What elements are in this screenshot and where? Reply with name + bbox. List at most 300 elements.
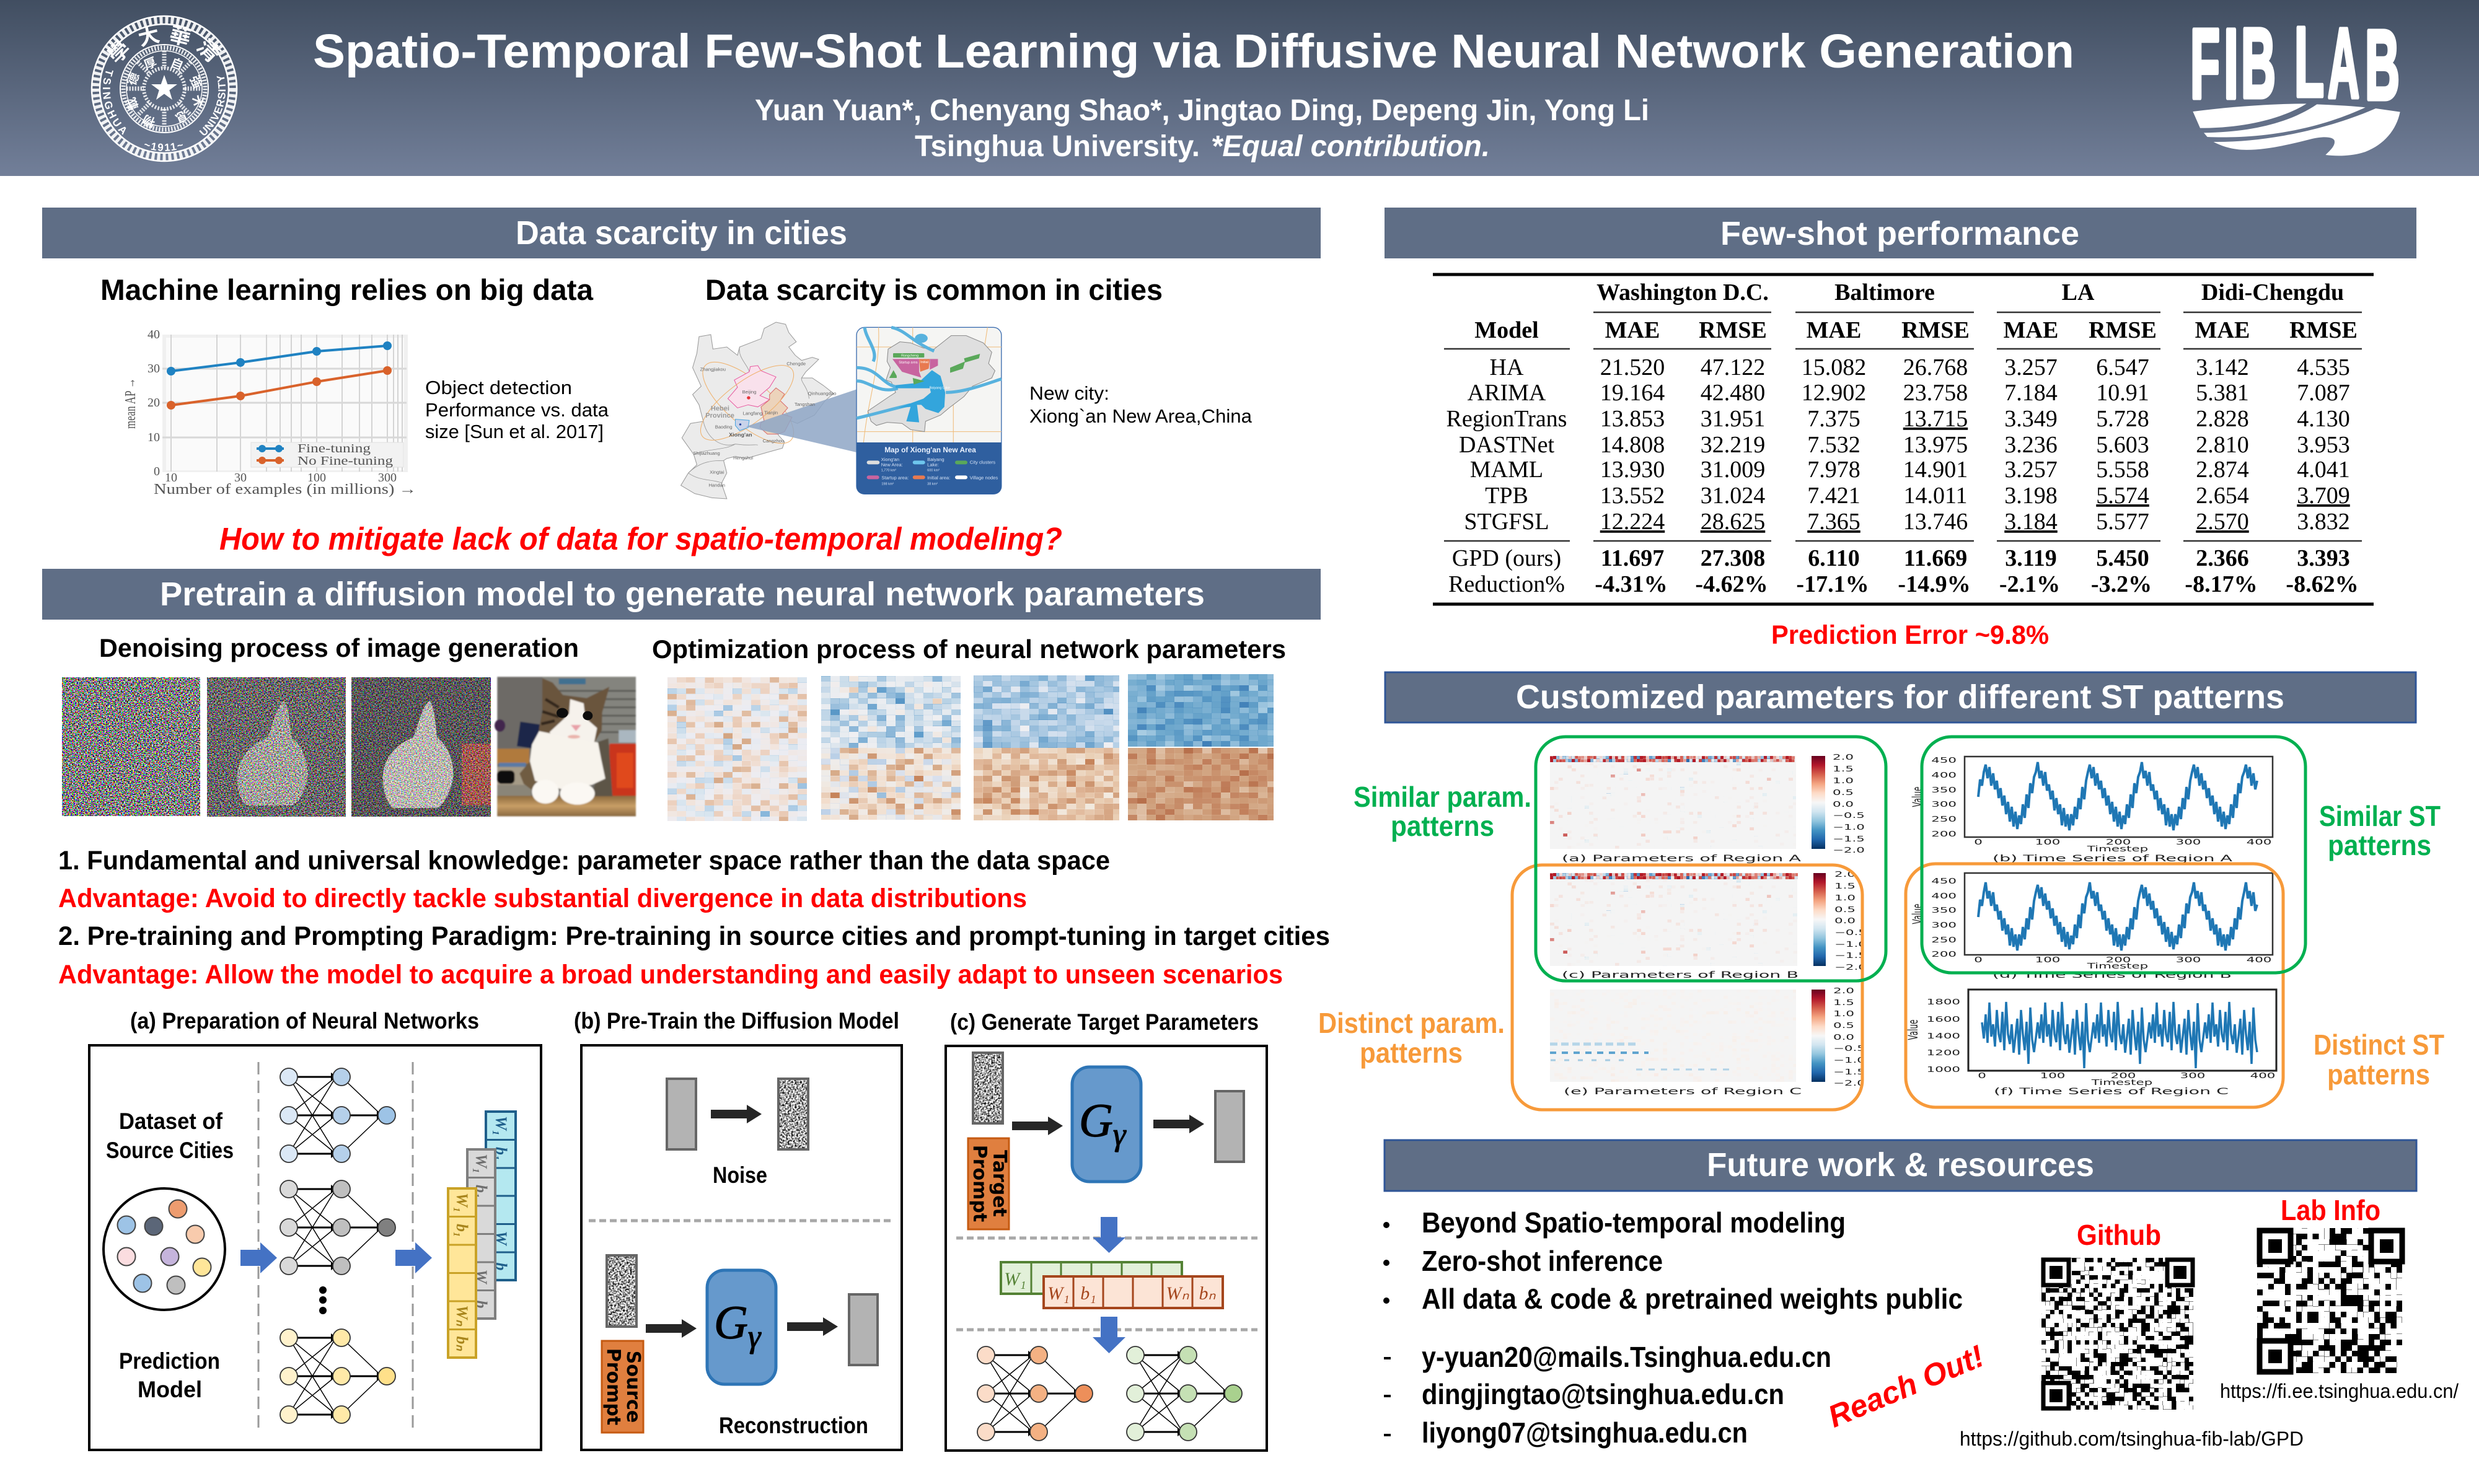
icon: FIB LAB logo: A [2328,7,2359,118]
line chart: time series of region A: Value [1911,787,1926,807]
icon: Tsinghua University seal: 大 [136,23,162,51]
label: distinct param patterns: Distinct param. [1318,1007,1505,1039]
icon: FIB LAB logo [2190,6,2400,156]
table row: TPB: 5.574 [2096,483,2149,509]
table row: RegionTrans: 7.375 [1807,406,1860,432]
box: source prompt: Source [622,1351,644,1423]
label: dataset of source cities [106,1109,234,1163]
heatmap: parameters of region C [1550,987,1884,1097]
parameter stack: cyan [486,1112,516,1280]
map: Xiong'an New Area inset: 38 km² [927,483,938,486]
map: Xiong'an New Area inset [856,327,1002,494]
heatmap: parameters of region C: 1.0 [1833,1010,1854,1018]
map: Beijing-Tianjin-Hebei region: Xiong'an [729,431,752,437]
line chart: time series of region C: 1800 [1927,998,1960,1006]
table row: TPB: 2.654 [2196,483,2249,509]
contact emails [1384,1341,1831,1449]
table row: HA: 26.768 [1903,354,1968,380]
block: output parameters [1215,1091,1244,1162]
table row: HA: HA [1490,354,1524,380]
table row: DASTNet: 3.236 [2004,432,2058,458]
line chart: time series of region A [1911,757,2273,864]
QR code: lab info [2257,1228,2405,1374]
block: generator G gamma [1072,1067,1141,1182]
heatmap: parameters of region C: (e) Parameters of Region C [1564,1087,1802,1097]
table row: STGFSL: 5.577 [2096,509,2149,535]
contact emails: y-yuan20@mails.Tsinghua.edu.cn [1422,1341,1831,1373]
line chart: time series of region B: 250 [1931,936,1957,944]
label: reconstruction: Reconstruction [719,1413,868,1438]
heatmap: parameters of region B: 1.0 [1834,894,1856,902]
arrow: networks to parameters [395,1242,432,1273]
line chart: time series of region A: 0 [1974,838,1983,846]
heatmap: parameters of region C: −0.5 [1833,1045,1865,1053]
diagram (c) heading: (c) Generate Target Parameters [950,1009,1259,1035]
link: github url: https://github.com/tsinghua-fib-lab/GPD [1960,1428,2304,1450]
table row: STGFSL: 2.570 [2196,509,2249,535]
map: Beijing-Tianjin-Hebei region: Tangshan [795,402,815,407]
table row: TPB: 7.421 [1807,483,1860,509]
map: Beijing-Tianjin-Hebei region: Beijing [742,389,756,395]
callout: research question: How to mitigate lack of data for spatio-temporal modeling? [219,521,1062,556]
table row: RegionTrans: RegionTrans [1446,406,1567,432]
line chart: time series of region B: 300 [1931,921,1957,929]
heatmap: parameters of region A: 0.0 [1833,801,1854,809]
heading bar: pretrain [42,569,1321,620]
table row: TPB: 3.709 [2297,483,2350,509]
map: Xiong'an New Area inset: City clusters [970,460,995,465]
line chart: time series of region A: 200 [2106,838,2131,846]
block: clean parameters [667,1079,696,1149]
parameter stack: yellow: b₁ [453,1224,471,1237]
heatmap: parameters of region A: −0.5 [1833,812,1865,820]
table row: reduction: -4.62% [1695,571,1768,597]
table row: reduction: -4.31% [1595,571,1668,597]
line chart: mean AP vs examples: 0 [154,465,160,478]
parameter row: green [1001,1262,1182,1294]
callout: prediction error: Prediction Error ~9.8% [1771,620,2049,650]
line chart: time series of region A: 300 [2176,838,2201,846]
line chart: time series of region B: 400 [1931,892,1957,900]
block: reconstructed parameters [849,1294,878,1365]
line chart: time series of region A: 300 [1931,801,1957,809]
parameter row: green: W₁ [1004,1269,1026,1289]
ellipsis dots [319,1286,327,1314]
table row: ARIMA: 19.164 [1600,380,1665,406]
label: similar param patterns [1354,781,1531,842]
heatmap: parameters of region B: 0.5 [1834,906,1856,914]
table row: reduction: -8.62% [2286,571,2359,597]
line chart: time series of region C: 1400 [1927,1032,1960,1040]
table row: MAML: 7.978 [1807,457,1860,483]
label: distinct param patterns [1318,1007,1505,1069]
icon: Tsinghua University seal [90,15,238,162]
table header: metrics: Model [1474,317,1539,343]
table row: MAML: 31.009 [1701,457,1765,483]
arrow: down to networks [1093,1317,1125,1353]
map: Xiong'an New Area inset: 198 km² [881,483,894,486]
table row: MAML: 3.257 [2004,457,2058,483]
map caption: new city: New city: [1029,382,1109,404]
table header: metrics: MAE [1605,317,1660,343]
parameter row: orange: b₁ [1080,1283,1096,1304]
line chart: time series of region C: Value [1906,1020,1921,1040]
icon: Tsinghua University seal: 清 [192,35,224,67]
icon: Tsinghua University seal: 德 [125,71,143,87]
icon: Tsinghua University seal: 強 [187,74,205,90]
line chart: time series of region B: 350 [1931,907,1957,915]
box: target prompt [968,1138,1010,1229]
parameter stack: gray: b₁ [472,1185,490,1198]
table header: metrics: RMSE [1699,317,1767,343]
table row: RegionTrans: 5.728 [2096,406,2149,432]
icon: FIB LAB logo: L [2294,6,2324,117]
heatmap: parameters of region B: 0.0 [1834,917,1856,925]
icon: Tsinghua University seal: 厚 [142,55,159,72]
table row: reduction: -2.1% [1999,571,2060,597]
heatmap: parameters of region C: 1.5 [1833,999,1854,1007]
line chart: time series of region A: 400 [1931,771,1957,779]
table row: HA: 21.520 [1600,354,1665,380]
map: Beijing-Tianjin-Hebei region: Xingtai [710,469,724,475]
map: Xiong'an New Area inset: 600 km² [927,469,940,473]
affiliation: Tsinghua University. [915,130,1200,163]
network: blue [280,1068,395,1162]
map: Beijing-Tianjin-Hebei region: Cangzhou [763,438,784,444]
icon: Tsinghua University seal: ~1911~ [144,143,183,151]
line chart: time series of region A: 200 [1931,830,1957,838]
authors: Yuan Yuan*, Chenyang Shao*, Jingtao Ding, Depeng Jin, Yong Li [755,94,1649,127]
heading bar: future work: Future work & resources [1707,1146,2094,1183]
table row: TPB: 14.011 [1903,483,1968,509]
map: Beijing-Tianjin-Hebei region: Zhangjiakou [700,366,726,372]
panel: customized parameters [1318,672,2444,1110]
bullet list: future work: Zero-shot inference [1422,1245,1663,1277]
line chart: mean AP vs examples: 300 [378,471,397,485]
map caption: new city [1029,382,1253,427]
heatmap: parameters of region B: −2.0 [1834,964,1867,972]
heading bar: data scarcity: Data scarcity in cities [516,214,847,252]
icon: Tsinghua University seal: 不 [188,92,206,109]
photo: cat [495,677,636,816]
heading bar: few-shot: Few-shot performance [1720,215,2079,252]
table row: DASTNet: 5.603 [2096,432,2149,458]
label: similar ST patterns [2319,800,2441,861]
table row: ARIMA: 42.480 [1701,380,1765,406]
heatmap: parameters of region A: 2.0 [1833,753,1854,762]
table row: TPB: 3.198 [2004,483,2058,509]
text block: key points: Advantage: Allow the model to acquire a broad understanding and easily adapt to unseen scenarios [58,960,1283,990]
parameter stack: yellow [448,1188,476,1358]
block: generator G gamma: γ [748,1319,762,1354]
arrow: input to generator [1012,1117,1063,1135]
table row: GPD ours: 3.393 [2297,545,2350,571]
table row: STGFSL: 3.832 [2297,509,2350,535]
table row: ARIMA: 12.902 [1802,380,1866,406]
block: generator G gamma: G [1079,1095,1113,1147]
table row: ARIMA: 23.758 [1903,380,1968,406]
line chart: time series of region B: Timestep [2087,962,2148,970]
diagram (b) heading: (b) Pre-Train the Diffusion Model [574,1008,899,1034]
heading bar: few-shot [1385,208,2416,258]
table row: STGFSL: STGFSL [1464,509,1549,535]
text block: key points [58,846,1330,990]
line chart: time series of region C: 0 [1978,1072,1986,1080]
header banner: B [2365,9,2400,120]
subheading: data scarcity common: Data scarcity is common in cities [705,273,1163,306]
table row: STGFSL: 13.746 [1903,509,1968,535]
heatmap: parameters of region C: 0.5 [1833,1022,1854,1030]
heading bar: customized parameters [1385,672,2416,722]
icon: Tsinghua University seal: UNIVERSITY [199,76,226,135]
label: lab info: Lab Info [2281,1194,2380,1226]
table row: MAML: MAML [1470,457,1543,483]
line chart: time series of region B: 200 [1931,951,1957,959]
table row: HA: 15.082 [1802,354,1866,380]
table row: HA: 4.535 [2297,354,2350,380]
line chart: time series of region C: Timestep [2091,1079,2152,1087]
icon: FIB LAB logo: F [2190,8,2220,119]
table row: STGFSL: 7.365 [1807,509,1860,535]
bullet list: future work: All data & code & pretrained weights public [1422,1283,1963,1315]
chart caption: object detection: Performance vs. data [425,399,609,421]
heatmap: parameters of region B: 2.0 [1834,871,1856,879]
line chart: time series of region A: 100 [2035,838,2060,846]
equal contribution note: *Equal contribution. [1211,130,1490,163]
table row: DASTNet: 3.953 [2297,432,2350,458]
table row: STGFSL: 12.224 [1600,509,1665,535]
line chart: time series of region B: Value [1911,904,1926,924]
network: orange [977,1346,1093,1441]
chart caption: object detection [425,377,609,442]
highlight boxes: similar patterns [1536,737,2305,981]
table row: GPD ours: 27.308 [1701,545,1765,571]
table row: ARIMA: 10.91 [2096,380,2149,406]
arrow: generator to output [787,1317,838,1336]
table header: metrics: MAE [2195,317,2250,343]
map: Beijing-Tianjin-Hebei region: Handan [708,483,725,488]
map: Beijing-Tianjin-Hebei region: Qinhuangdao [808,391,836,397]
map: Xiong'an New Area inset: Map of Xiong'an New Area [884,446,976,454]
label: dataset of source cities: Source Cities [106,1138,234,1163]
chart caption: object detection: Object detection [425,377,572,398]
panel: data scarcity in cities [42,208,1321,556]
panel: pretrain a diffusion model [42,569,1330,1451]
text block: key points: Advantage: Avoid to directly tackle substantial divergence in data distributions [58,884,1027,913]
table header: cities: LA [2062,279,2095,305]
parameter row: orange: Wₙ [1166,1283,1190,1304]
line chart: time series of region B: 0 [1974,956,1983,964]
diagram (c): generate target parameters [946,1046,1267,1451]
line chart: time series of region B: (d) Time Series of Region B [1992,970,2232,980]
image strip: parameter heatmaps [667,674,1274,821]
heatmap: parameters of region A: (a) Parameters of Region A [1562,854,1802,864]
line chart: mean AP vs examples: 100 [307,471,326,485]
map: Beijing-Tianjin-Hebei region: Chengde [786,361,806,366]
line chart: time series of region A: (b) Time Series of Region A [1992,854,2233,864]
label: similar param patterns: patterns [1391,810,1494,842]
heading bar: future work [1385,1140,2416,1191]
block: noisy input [607,1255,636,1327]
map: Beijing-Tianjin-Hebei region: Province [705,412,734,419]
line chart: mean AP vs examples: 10 [148,431,160,444]
heatmap: parameters of region B: −0.5 [1834,929,1867,937]
line chart: mean AP vs examples: 30 [234,471,247,485]
heatmap: parameters of region B: −1.5 [1834,952,1867,960]
map: Beijing-Tianjin-Hebei region: Baoding [715,424,733,430]
line chart: mean AP vs examples: 40 [148,328,160,341]
map: Xiong'an New Area inset: Baiyang Lake [930,386,950,390]
map: Xiong'an New Area inset: 1,770 km² [881,469,896,473]
table row: MAML: 14.901 [1903,457,1968,483]
table row: RegionTrans: 31.951 [1701,406,1765,432]
icon: Tsinghua University seal: 息 [173,107,190,126]
map: Xiong'an New Area inset: Baiyang [927,457,944,462]
label: similar ST patterns: patterns [2328,829,2431,861]
parameter stack: yellow: W₁ [453,1193,471,1213]
label: distinct ST patterns: patterns [2327,1058,2430,1091]
table row: reduction: Reduction% [1448,571,1565,597]
parameter row: orange: bₙ [1199,1283,1217,1304]
table row: GPD ours: 11.669 [1904,545,1967,571]
label: similar ST patterns: Similar ST [2319,800,2441,832]
table row: GPD ours: 2.366 [2196,545,2249,571]
heading bar: data scarcity [42,208,1321,258]
table row: RegionTrans: 3.349 [2004,406,2058,432]
block: noise input [973,1053,1003,1123]
heatmap: parameters of region C: −1.5 [1833,1068,1865,1076]
block: generator G gamma: G [714,1297,748,1349]
table row: TPB: 31.024 [1701,483,1765,509]
table row: RegionTrans: 13.715 [1903,406,1968,432]
icon: Tsinghua University seal: 載 [124,95,141,112]
parameter stack: cyan: W [492,1231,510,1246]
label: distinct param patterns: patterns [1360,1037,1463,1069]
table row: MAML: 5.558 [2096,457,2149,483]
table row: STGFSL: 28.625 [1701,509,1765,535]
table row: RegionTrans: 2.828 [2196,406,2249,432]
icon: Tsinghua University seal: 學 [103,37,135,68]
map: Beijing-Tianjin-Hebei region: Tianjin [764,410,778,415]
panel: future work and resources [1383,1140,2459,1450]
table row: GPD ours: 5.450 [2096,545,2149,571]
line chart: time series of region C: (f) Time Series of Region C [1994,1087,2229,1097]
table row: HA: 3.257 [2004,354,2058,380]
heatmap: parameters of region A: 0.5 [1833,789,1854,797]
subheading: machine learning: Machine learning relies on big data [100,273,594,306]
table row: DASTNet: 13.975 [1903,432,1968,458]
table row: RegionTrans: 13.853 [1600,406,1665,432]
heatmap: parameters of region B [1550,871,1884,980]
panel: few-shot performance [1385,208,2416,650]
label: github: Github [2077,1219,2161,1251]
table row: MAML: 4.041 [2297,457,2350,483]
parameter stack: cyan: b₁ [492,1147,510,1161]
label: prediction model: Model [138,1377,202,1402]
text block: key points: 2. Pre-training and Prompting Paradigm: Pre-training in source cities and prompt-tuning in target cities [58,921,1330,951]
line chart: time series of region C: 1000 [1927,1066,1960,1074]
heatmap: parameters of region A [1550,753,1865,864]
table row: reduction: -17.1% [1796,571,1869,597]
map: Xiong'an New Area inset: Rongcheng [901,354,918,358]
label: noise: Noise [713,1162,767,1188]
line chart: time series of region A: 350 [1931,786,1957,794]
table row: GPD ours: 3.119 [2005,545,2057,571]
bullet list: future work: Beyond Spatio-temporal modeling [1422,1206,1846,1239]
line chart: time series of region A: 250 [1931,815,1957,823]
block: generator G gamma: γ [1113,1117,1127,1153]
heatmap: parameters of region A: −2.0 [1833,846,1865,854]
heatmap: parameters of region A: 1.5 [1833,765,1854,773]
heatmap: parameters of region A: 1.0 [1833,777,1854,785]
table row: ARIMA: 7.087 [2297,380,2350,406]
map: Xiong'an New Area inset: New Area: [881,462,903,468]
title: Spatio-Temporal Few-Shot Learning via Diffusive Neural Network Generation [313,25,2074,78]
box: target prompt: Prompt [969,1145,990,1222]
line chart: time series of region C: 200 [2111,1072,2136,1080]
network: yellow [280,1329,395,1423]
heading bar: pretrain: Pretrain a diffusion model to generate neural network parameters [160,576,1205,613]
line chart: time series of region C: 1200 [1927,1049,1960,1057]
table row: DASTNet: 7.532 [1807,432,1860,458]
map: Xiong'an New Area inset: Startup area [899,361,918,365]
label: prediction model [119,1348,220,1402]
arrow: generator to output [1153,1115,1204,1133]
parameter stack: yellow: Wₙ [453,1305,471,1327]
box: source prompt [602,1341,644,1433]
callout: reach out: Reach Out! [1823,1338,1989,1434]
chart caption: object detection: size [Sun et al. 2017] [425,421,604,442]
line chart: time series of region C [1906,990,2276,1097]
link: lab url: https://fi.ee.tsinghua.edu.cn/ [2220,1380,2459,1402]
diagram (a) heading: (a) Preparation of Neural Networks [130,1008,479,1034]
table row: ARIMA: 5.381 [2196,380,2249,406]
header banner [0,0,2479,176]
line chart: time series of region C: 100 [2040,1072,2065,1080]
parameter stack: cyan: W₁ [492,1116,510,1136]
label: similar param patterns: Similar param. [1354,781,1531,813]
table row: reduction: -8.17% [2185,571,2258,597]
parameter stack: yellow: bₙ [453,1336,471,1351]
line chart: mean AP vs examples: 10 [165,471,177,485]
map: Beijing-Tianjin-Hebei region: Shijiazhuang [693,450,720,456]
table header: cities: Baltimore [1834,279,1935,305]
parameter stack: gray: W₁ [472,1154,490,1174]
table row: DASTNet: 2.810 [2196,432,2249,458]
map: Xiong'an New Area inset: Initial area: [927,475,950,480]
table row: DASTNet: 14.808 [1600,432,1665,458]
line chart: time series of region B: 300 [2176,956,2201,964]
parameter stack: gray [467,1149,495,1319]
heatmap: parameters of region B: 1.5 [1834,882,1856,890]
label: dataset of source cities: Dataset of [119,1109,223,1134]
line chart: time series of region B: 200 [2106,956,2131,964]
box: source prompt: Prompt [602,1348,624,1425]
table header: cities: Washington D.C. [1596,279,1769,305]
arrow: dataset to networks [240,1242,277,1273]
parameter row: orange: W₁ [1047,1283,1070,1304]
table row: DASTNet: 32.219 [1701,432,1765,458]
table row: MAML: 2.874 [2196,457,2249,483]
heatmap: parameters of region B: (c) Parameters of Region B [1562,970,1799,980]
line chart: time series of region B: 400 [2247,956,2271,964]
parameter row: orange [1044,1276,1223,1308]
line chart: time series of region C: 1600 [1927,1016,1960,1024]
table row: HA: 6.547 [2096,354,2149,380]
map: Xiong'an New Area inset: Startup area: [881,475,909,480]
line chart: time series of region B: 100 [2035,956,2060,964]
table row: reduction: -3.2% [2091,571,2152,597]
